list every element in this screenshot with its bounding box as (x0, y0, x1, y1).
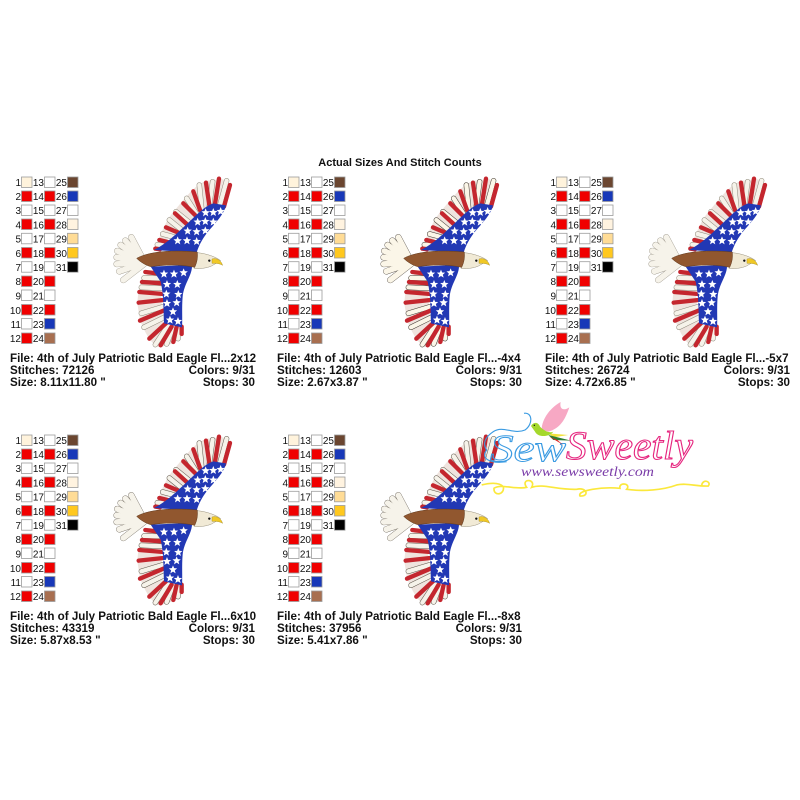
color legend: 26 (591, 192, 602, 203)
color legend: 15 (300, 206, 311, 217)
blue flourish (485, 413, 531, 462)
color legend: 23 (33, 320, 44, 331)
color legend: 31 (323, 521, 334, 532)
color legend: 20 (300, 277, 311, 288)
color legend: 30 (56, 249, 67, 260)
file details (277, 610, 523, 647)
color legend: 15 (33, 464, 44, 475)
color legend: 2 (15, 192, 21, 203)
color legend: 26 (323, 450, 334, 461)
file details: Stops: 30 (470, 376, 522, 389)
color legend: 23 (33, 578, 44, 589)
color legend: 24 (33, 334, 44, 345)
file details: File: 4th of July Patriotic Bald Eagle Fl...-8x8 (277, 610, 521, 623)
color legend: 13 (300, 436, 311, 447)
color legend: 2 (282, 450, 288, 461)
color legend: 28 (56, 220, 67, 232)
file details: Colors: 9/31 (189, 364, 256, 377)
color legend: 19 (33, 263, 44, 274)
color legend: 12 (277, 334, 288, 345)
color legend: 22 (33, 564, 44, 575)
file details: Size: 8.11x11.80 " (10, 376, 106, 389)
color legend: 8 (15, 535, 21, 546)
color legend: 3 (15, 464, 21, 475)
file details (277, 352, 523, 389)
color legend: 23 (568, 320, 579, 331)
color legend: 25 (56, 178, 67, 189)
panel: 8x8 design (277, 435, 523, 647)
color legend: 18 (33, 249, 44, 260)
color legend: 8 (282, 277, 288, 288)
color legend: 29 (591, 235, 602, 246)
color legend: 13 (568, 178, 579, 189)
color legend: 10 (277, 306, 288, 317)
color legend (10, 177, 78, 345)
color legend: 14 (300, 450, 311, 461)
color legend: 6 (282, 507, 288, 518)
color legend: 27 (591, 206, 602, 217)
file details: Colors: 9/31 (456, 364, 523, 377)
file details: Size: 5.87x8.53 " (10, 634, 101, 647)
color legend: 27 (56, 206, 67, 217)
color legend: 28 (323, 478, 334, 490)
color legend: 12 (10, 334, 21, 345)
color legend: 3 (282, 464, 288, 475)
eagle illustration (117, 178, 230, 347)
color legend: 2 (15, 450, 21, 461)
color legend: 1 (282, 178, 288, 189)
color legend: 25 (323, 436, 334, 447)
color legend: 2 (550, 192, 556, 203)
color legend: 23 (300, 320, 311, 331)
color legend: 22 (568, 306, 579, 317)
file details: Stitches: 12603 (277, 364, 362, 377)
logo wordmark: Sweetly (566, 423, 693, 468)
file details: Size: 4.72x6.85 " (545, 376, 636, 389)
file details: Colors: 9/31 (724, 364, 791, 377)
color legend: 3 (550, 206, 556, 217)
file details: File: 4th of July Patriotic Bald Eagle Fl...6x10 (10, 610, 256, 623)
file details: Stops: 30 (203, 634, 255, 647)
color legend: 27 (323, 464, 334, 475)
color legend: 4 (282, 478, 288, 490)
color legend: 26 (56, 192, 67, 203)
color legend: 28 (323, 220, 334, 232)
color legend: 5 (550, 235, 556, 246)
file details (545, 352, 791, 389)
color legend: 30 (323, 507, 334, 518)
color legend: 14 (568, 192, 579, 203)
color legend: 2 (282, 192, 288, 203)
color legend: 9 (15, 550, 21, 560)
color legend: 1 (15, 436, 21, 447)
file details: Colors: 9/31 (456, 622, 523, 635)
bird icon (531, 402, 571, 445)
color legend: 9 (550, 292, 556, 302)
color legend: 25 (323, 178, 334, 189)
color legend: 21 (300, 292, 311, 302)
color legend: 19 (33, 521, 44, 532)
color legend: 30 (323, 249, 334, 260)
color legend: 11 (278, 320, 288, 331)
color legend: 6 (15, 249, 21, 260)
color legend: 13 (33, 436, 44, 447)
color legend (10, 435, 78, 603)
file details: Stitches: 72126 (10, 364, 95, 377)
color legend: 10 (277, 564, 288, 575)
color legend: 7 (550, 263, 556, 274)
color legend: 14 (33, 192, 44, 203)
color legend: 18 (33, 507, 44, 518)
title: Actual Sizes And Stitch Counts (318, 157, 482, 169)
color legend: 16 (33, 478, 44, 490)
color legend: 17 (33, 493, 44, 504)
logo wordmark (490, 423, 693, 470)
color legend: 20 (300, 535, 311, 546)
eagle illustration (384, 436, 497, 605)
panel: 2x12 design (10, 177, 256, 389)
panel: 4x4 design (277, 177, 523, 389)
color legend: 24 (300, 334, 311, 345)
color legend: 10 (10, 306, 21, 317)
color legend: 15 (300, 464, 311, 475)
color legend: 21 (33, 292, 44, 302)
logo wordmark: Sew (490, 428, 567, 470)
color legend: 19 (300, 521, 311, 532)
color legend: 8 (282, 535, 288, 546)
color legend: 1 (550, 178, 556, 189)
file details: Size: 5.41x7.86 " (277, 634, 368, 647)
color legend: 24 (300, 592, 311, 603)
color legend: 29 (323, 493, 334, 504)
color legend: 18 (568, 249, 579, 260)
color legend: 14 (33, 450, 44, 461)
color legend: 10 (545, 306, 556, 317)
color legend: 14 (300, 192, 311, 203)
color legend: 25 (56, 436, 67, 447)
color legend: 20 (33, 277, 44, 288)
color legend: 31 (56, 263, 67, 274)
color legend: 22 (300, 564, 311, 575)
color legend: 27 (56, 464, 67, 475)
color legend (277, 177, 345, 345)
color legend: 31 (591, 263, 602, 274)
color legend: 4 (15, 478, 21, 490)
file details: File: 4th of July Patriotic Bald Eagle Fl...2x12 (10, 352, 256, 365)
file details: Stitches: 26724 (545, 364, 630, 377)
file details: Colors: 9/31 (189, 622, 256, 635)
color legend: 18 (300, 507, 311, 518)
color legend: 26 (323, 192, 334, 203)
color legend: 13 (33, 178, 44, 189)
color legend: 1 (282, 436, 288, 447)
color legend: 3 (282, 206, 288, 217)
color legend: 24 (568, 334, 579, 345)
file details: Stitches: 37956 (277, 622, 362, 635)
color legend: 6 (15, 507, 21, 518)
logo website address: www.sewsweetly.com (521, 464, 654, 479)
color legend: 7 (282, 521, 288, 532)
color legend: 16 (300, 478, 311, 490)
color legend: 9 (15, 292, 21, 302)
color legend: 16 (568, 220, 579, 232)
color legend: 5 (15, 235, 21, 246)
color legend: 30 (591, 249, 602, 260)
file details: Stops: 30 (203, 376, 255, 389)
file details (10, 352, 256, 389)
file details: Stitches: 43319 (10, 622, 95, 635)
color legend: 31 (56, 521, 67, 532)
color legend: 1 (15, 178, 21, 189)
color legend: 10 (10, 564, 21, 575)
panel: 5x7 design (545, 177, 791, 389)
color legend: 23 (300, 578, 311, 589)
file details: File: 4th of July Patriotic Bald Eagle Fl...-5x7 (545, 352, 789, 365)
color legend: 11 (11, 320, 21, 331)
color legend: 25 (591, 178, 602, 189)
logo: Sew Sweetly (482, 402, 709, 496)
file details: Size: 2.67x3.87 " (277, 376, 368, 389)
color legend: 17 (300, 235, 311, 246)
panel: 6x10 design (10, 435, 256, 647)
color legend: 15 (33, 206, 44, 217)
color legend: 19 (300, 263, 311, 274)
color legend: 17 (300, 493, 311, 504)
color legend: 8 (15, 277, 21, 288)
color legend: 4 (550, 220, 556, 232)
color legend (545, 177, 613, 345)
color legend: 16 (33, 220, 44, 232)
color legend: 11 (278, 578, 288, 589)
color legend: 7 (15, 521, 21, 532)
color legend: 31 (323, 263, 334, 274)
color legend: 16 (300, 220, 311, 232)
file details: Stops: 30 (738, 376, 790, 389)
color legend: 18 (300, 249, 311, 260)
color legend: 5 (282, 493, 288, 504)
color legend: 21 (568, 292, 579, 302)
color legend: 3 (15, 206, 21, 217)
file details: File: 4th of July Patriotic Bald Eagle Fl...-4x4 (277, 352, 521, 365)
color legend: 27 (323, 206, 334, 217)
color legend: 9 (282, 550, 288, 560)
eagle illustration (384, 178, 497, 347)
eagle illustration (117, 436, 230, 605)
color legend: 7 (282, 263, 288, 274)
color legend: 12 (10, 592, 21, 603)
color legend: 5 (282, 235, 288, 246)
color legend: 29 (56, 235, 67, 246)
color legend (277, 435, 345, 603)
eagle illustration (652, 178, 765, 347)
color legend: 21 (300, 550, 311, 560)
color legend: 7 (15, 263, 21, 274)
color legend: 12 (545, 334, 556, 345)
color legend: 9 (282, 292, 288, 302)
color legend: 22 (300, 306, 311, 317)
color legend: 11 (546, 320, 556, 331)
yellow scroll line (482, 481, 709, 496)
color legend: 5 (15, 493, 21, 504)
color legend: 22 (33, 306, 44, 317)
color legend: 30 (56, 507, 67, 518)
color legend: 20 (33, 535, 44, 546)
file details (10, 610, 256, 647)
color legend: 13 (300, 178, 311, 189)
color legend: 15 (568, 206, 579, 217)
color legend: 12 (277, 592, 288, 603)
color legend: 24 (33, 592, 44, 603)
color legend: 20 (568, 277, 579, 288)
color legend: 8 (550, 277, 556, 288)
color legend: 29 (323, 235, 334, 246)
color legend: 17 (33, 235, 44, 246)
color legend: 28 (56, 478, 67, 490)
file details: Stops: 30 (470, 634, 522, 647)
color legend: 6 (282, 249, 288, 260)
color legend: 21 (33, 550, 44, 560)
color legend: 4 (282, 220, 288, 232)
color legend: 17 (568, 235, 579, 246)
color legend: 4 (15, 220, 21, 232)
color legend: 28 (591, 220, 602, 232)
color legend: 29 (56, 493, 67, 504)
color legend: 26 (56, 450, 67, 461)
color legend: 6 (550, 249, 556, 260)
color legend: 11 (11, 578, 21, 589)
color legend: 19 (568, 263, 579, 274)
